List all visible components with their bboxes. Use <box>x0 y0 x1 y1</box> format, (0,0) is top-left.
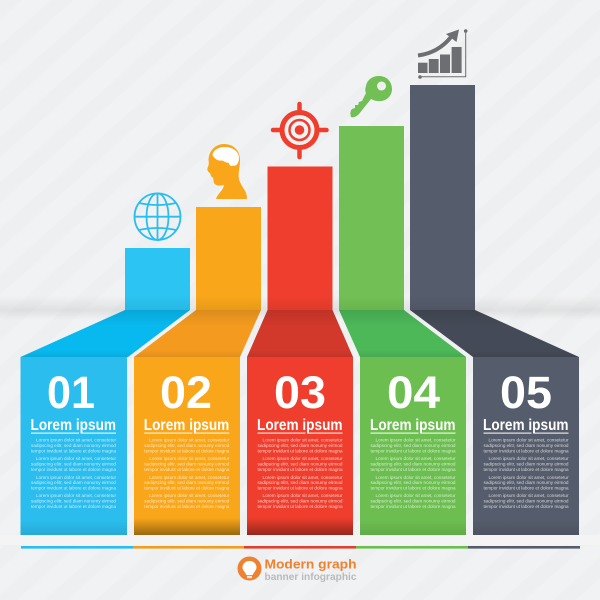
panel 03 <box>247 357 353 535</box>
body text 05: Lorem ipsum dolor sit amet, consetetur <box>488 438 569 444</box>
body text 01: sadipscing elitr, sed diam nonumy eirmod <box>31 498 116 504</box>
heading 01: Lorem ipsum <box>30 417 116 434</box>
body text 05: sadipscing elitr, sed diam nonumy eirmod <box>484 498 569 504</box>
horizon shadow <box>0 296 600 320</box>
body text 01: sadipscing elitr, sed diam nonumy eirmod <box>31 480 116 486</box>
body text 01 <box>31 438 116 510</box>
body text 05: sadipscing elitr, sed diam nonumy eirmod <box>484 443 569 449</box>
body text 05 <box>484 438 569 510</box>
icon: key <box>350 76 392 117</box>
logo subtitle: banner infographic <box>264 572 357 583</box>
body text 03: Lorem ipsum dolor sit amet, consetetur <box>262 438 343 444</box>
body text 03: sadipscing elitr, sed diam nonumy eirmod <box>258 443 343 449</box>
body text 05: tempor invidunt ut labore et dolore magna <box>484 504 569 510</box>
body text 04: Lorem ipsum dolor sit amet, consetetur <box>376 475 456 481</box>
body text 04: tempor invidunt ut labore et dolore magna <box>370 448 456 454</box>
body text 02: sadipscing elitr, sed diam nonumy eirmod <box>144 462 230 468</box>
body text 02: sadipscing elitr, sed diam nonumy eirmod <box>144 480 230 486</box>
fold: orange <box>134 310 261 357</box>
body text 01: Lorem ipsum dolor sit amet, consetetur <box>36 456 116 462</box>
panel 05 <box>473 357 579 535</box>
heading 05: Lorem ipsum <box>483 417 568 434</box>
body text 02: Lorem ipsum dolor sit amet, consetetur <box>149 456 230 462</box>
number 04: 04 <box>387 367 440 418</box>
icon: head with brain <box>207 144 247 199</box>
body text 05: Lorem ipsum dolor sit amet, consetetur <box>488 493 569 499</box>
body text 04: sadipscing elitr, sed diam nonumy eirmod <box>370 462 456 468</box>
body text 04: Lorem ipsum dolor sit amet, consetetur <box>376 456 456 462</box>
body text 01: Lorem ipsum dolor sit amet, consetetur <box>36 438 116 444</box>
body text 01: tempor invidunt ut labore et dolore magna <box>31 467 116 473</box>
body text 03: tempor invidunt ut labore et dolore magna <box>258 448 343 454</box>
body text 04: sadipscing elitr, sed diam nonumy eirmod <box>370 443 456 449</box>
fold: green <box>339 310 466 357</box>
body text 03: sadipscing elitr, sed diam nonumy eirmod <box>258 498 343 504</box>
number 01: 01 <box>47 367 95 418</box>
heading 03: Lorem ipsum <box>257 417 342 434</box>
body text 04: sadipscing elitr, sed diam nonumy eirmod <box>370 498 456 504</box>
panel 02 <box>134 357 240 535</box>
heading 02: Lorem ipsum <box>144 417 229 434</box>
body text 01: tempor invidunt ut labore et dolore magna <box>31 448 116 454</box>
logo title: Modern graph <box>264 556 357 572</box>
number 03: 03 <box>274 367 326 418</box>
body text 02: sadipscing elitr, sed diam nonumy eirmod <box>144 498 230 504</box>
body text 02: Lorem ipsum dolor sit amet, consetetur <box>149 493 230 499</box>
body text 04: sadipscing elitr, sed diam nonumy eirmod <box>370 480 456 486</box>
icon: globe <box>134 193 180 240</box>
body text 05: tempor invidunt ut labore et dolore magna <box>484 448 569 454</box>
fold: dark <box>410 310 579 357</box>
footer band <box>0 535 600 545</box>
body text 03: sadipscing elitr, sed diam nonumy eirmod <box>258 480 343 486</box>
number 02: 02 <box>160 367 212 418</box>
body text 03: sadipscing elitr, sed diam nonumy eirmod <box>258 462 343 468</box>
body text 04: Lorem ipsum dolor sit amet, consetetur <box>376 493 456 499</box>
body text 04 <box>370 438 456 510</box>
body text 02: Lorem ipsum dolor sit amet, consetetur <box>149 438 230 444</box>
bar: red <box>268 166 332 310</box>
body text 01: sadipscing elitr, sed diam nonumy eirmod <box>31 462 116 468</box>
body text 05: sadipscing elitr, sed diam nonumy eirmod <box>484 480 569 486</box>
body text 03: tempor invidunt ut labore et dolore magna <box>258 467 343 473</box>
icon: growth chart <box>418 29 468 79</box>
body text 02: tempor invidunt ut labore et dolore magna <box>144 467 230 473</box>
body text 01: tempor invidunt ut labore et dolore magna <box>31 486 116 492</box>
number 05: 05 <box>500 367 552 418</box>
body text 01: Lorem ipsum dolor sit amet, consetetur <box>36 475 116 481</box>
fold: blue <box>20 310 190 357</box>
body text 03 <box>258 438 343 510</box>
body text 05: Lorem ipsum dolor sit amet, consetetur <box>488 456 569 462</box>
body text 03: Lorem ipsum dolor sit amet, consetetur <box>262 475 343 481</box>
body text 05: tempor invidunt ut labore et dolore magna <box>484 486 569 492</box>
body text 02: sadipscing elitr, sed diam nonumy eirmod <box>144 443 230 449</box>
heading 04: Lorem ipsum <box>370 417 456 434</box>
icon: light bulb <box>238 556 262 580</box>
body text 04: tempor invidunt ut labore et dolore magna <box>370 504 456 510</box>
fold: red <box>247 310 353 357</box>
body text 02: tempor invidunt ut labore et dolore magna <box>144 486 230 492</box>
body text 05: Lorem ipsum dolor sit amet, consetetur <box>488 475 569 481</box>
bar: orange <box>196 207 261 310</box>
body text 03: Lorem ipsum dolor sit amet, consetetur <box>262 456 343 462</box>
body text 02: tempor invidunt ut labore et dolore magna <box>144 448 230 454</box>
bottom colour rule <box>21 546 580 549</box>
body text 02: Lorem ipsum dolor sit amet, consetetur <box>149 475 230 481</box>
body text 04: Lorem ipsum dolor sit amet, consetetur <box>376 438 456 444</box>
body text 04: tempor invidunt ut labore et dolore magna <box>370 467 456 473</box>
logo <box>238 556 357 583</box>
panel 04 <box>360 357 466 535</box>
body text 02: tempor invidunt ut labore et dolore magna <box>144 504 230 510</box>
body text 01: sadipscing elitr, sed diam nonumy eirmod <box>31 443 116 449</box>
body text 03: tempor invidunt ut labore et dolore magna <box>258 486 343 492</box>
body text 05: tempor invidunt ut labore et dolore magna <box>484 467 569 473</box>
panel 01 <box>20 357 127 535</box>
icon: target <box>273 104 326 157</box>
body text 05: sadipscing elitr, sed diam nonumy eirmod <box>484 462 569 468</box>
body text 04: tempor invidunt ut labore et dolore magna <box>370 486 456 492</box>
body text 02 <box>144 438 230 510</box>
bar: green <box>339 126 404 310</box>
body text 01: Lorem ipsum dolor sit amet, consetetur <box>36 493 116 499</box>
body text 03: Lorem ipsum dolor sit amet, consetetur <box>262 493 343 499</box>
body text 01: tempor invidunt ut labore et dolore magna <box>31 504 116 510</box>
bar: dark <box>410 85 475 310</box>
body text 03: tempor invidunt ut labore et dolore magna <box>258 504 343 510</box>
bar: blue <box>125 248 190 310</box>
